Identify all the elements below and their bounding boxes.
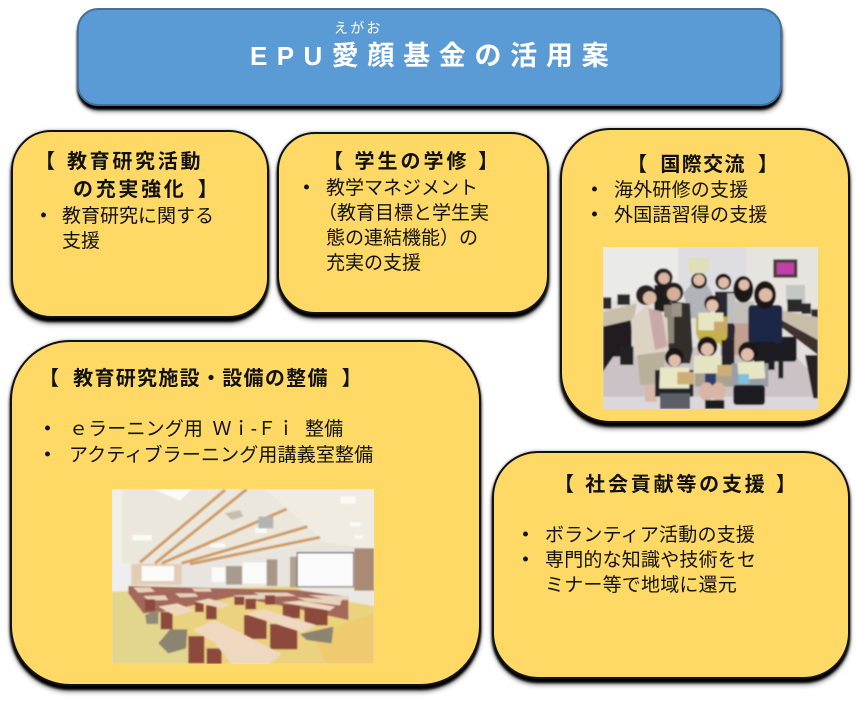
beams bbox=[140, 489, 320, 564]
bullets: ・ bbox=[38, 445, 57, 466]
items: ボランティア活動の支援 bbox=[545, 525, 755, 546]
back row bbox=[654, 268, 673, 287]
heading line 2: の充実強化 】 bbox=[73, 179, 220, 201]
bullets: ・ bbox=[585, 180, 604, 201]
panel: education research bbox=[11, 130, 269, 318]
items bbox=[614, 180, 768, 226]
items: アクティブラーニング用講義室整備 bbox=[69, 445, 373, 466]
bullets bbox=[516, 525, 535, 571]
items: 外国語習得の支援 bbox=[614, 205, 768, 226]
panel: international exchange bbox=[560, 128, 850, 423]
screens bbox=[142, 566, 174, 581]
item: 教学マネジメント bbox=[326, 178, 478, 199]
panel: social contribution bbox=[492, 451, 850, 679]
photo: lecture room bbox=[112, 489, 374, 664]
item: 支援 bbox=[62, 231, 100, 252]
bullets: ・ bbox=[516, 550, 535, 571]
items: ｅラーニング用 Ｗｉ-Ｆｉ 整備 bbox=[69, 419, 343, 440]
title banner bbox=[74, 8, 786, 115]
heading: 【 社会貢献等の支援 】 bbox=[554, 474, 799, 496]
panel: student learning bbox=[277, 132, 549, 314]
furigana: えがお bbox=[334, 20, 383, 36]
items: 専門的な知識や技術をセ bbox=[545, 550, 756, 571]
items: 海外研修の支援 bbox=[614, 180, 748, 201]
bullets bbox=[585, 180, 604, 226]
photo: group of students with certificates bbox=[603, 247, 818, 409]
bullet: ・ bbox=[297, 178, 316, 199]
item bbox=[62, 206, 214, 252]
bullets: ・ bbox=[585, 205, 604, 226]
left pair bbox=[664, 302, 693, 363]
bullets: ・ bbox=[516, 525, 535, 546]
items bbox=[69, 419, 373, 466]
heading: 【 教育研究活動 bbox=[35, 151, 203, 173]
heading: 【 教育研究施設・設備の整備 】 bbox=[39, 368, 363, 390]
near desks bbox=[158, 599, 335, 664]
bullet: ・ bbox=[34, 206, 53, 227]
front row bbox=[655, 370, 693, 397]
item: （教育目標と学生実 bbox=[318, 203, 489, 224]
panel: facilities bbox=[10, 340, 481, 686]
item: 態の連結機能）の bbox=[326, 228, 478, 249]
items: ミナー等で地域に還元 bbox=[545, 575, 737, 596]
skylight and lights bbox=[153, 489, 192, 501]
item: 充実の支援 bbox=[326, 253, 421, 274]
heading: 【 国際交流 】 bbox=[627, 154, 779, 176]
heading: 【 学生の学修 】 bbox=[323, 151, 501, 173]
middle person bbox=[696, 317, 727, 347]
title text: EPU愛顔基金の活用案 bbox=[250, 41, 617, 71]
back rows bbox=[128, 586, 348, 620]
bullets: ・ bbox=[38, 419, 57, 440]
item bbox=[318, 178, 489, 274]
near chairs bbox=[145, 595, 328, 664]
item: 教育研究に関する bbox=[62, 206, 214, 227]
bullets bbox=[38, 419, 57, 466]
items bbox=[545, 525, 756, 596]
